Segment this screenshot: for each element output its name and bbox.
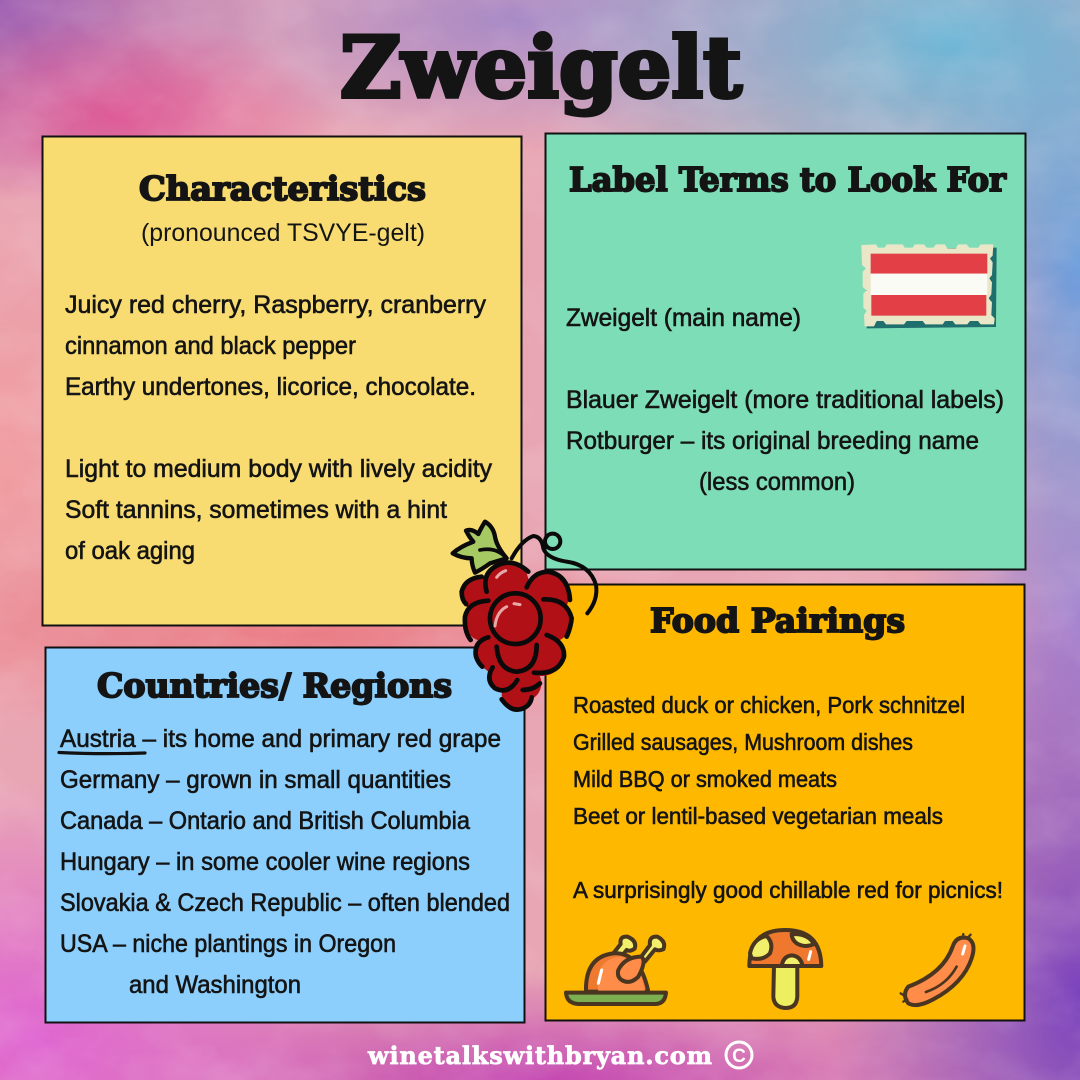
icon: grape cluster [453, 522, 596, 710]
title: Zweigelt [340, 18, 742, 117]
berry highlights [495, 571, 520, 626]
characteristics text: Soft tannins, sometimes with a hint [65, 496, 447, 524]
food pairings text: Beet or lentil-based vegetarian meals [573, 803, 943, 829]
berries fill [461, 561, 572, 710]
characteristics text: Juicy red cherry, Raspberry, cranberry [65, 291, 486, 319]
countries text: Hungary – in some cooler wine regions [60, 848, 470, 876]
countries text: Germany – grown in small quantities [60, 766, 451, 794]
heading: characteristics: Characteristics [139, 169, 426, 208]
label terms text [566, 304, 1004, 496]
countries text: Austria – its home and primary red grape [60, 725, 501, 753]
heading: countries: Countries/ Regions [97, 666, 452, 705]
label terms text: Zweigelt (main name) [566, 304, 801, 332]
Austria underline [59, 752, 145, 754]
icon: roast chicken [566, 937, 666, 1004]
pronunciation note: (pronounced TSVYE-gelt) [141, 219, 425, 247]
tendril [512, 536, 596, 613]
characteristics text: cinnamon and black pepper [65, 332, 356, 360]
label terms text: Blauer Zweigelt (more traditional labels) [566, 386, 1004, 414]
characteristics text [65, 291, 492, 565]
copyright symbol: C [732, 1046, 746, 1067]
food pairings text: Grilled sausages, Mushroom dishes [573, 729, 913, 755]
icon: sausage [901, 934, 973, 1005]
food pairings text: Roasted duck or chicken, Pork schnitzel [573, 692, 965, 718]
copyright symbol [726, 1042, 752, 1068]
berry outlines [462, 563, 572, 710]
food pairings text: Mild BBQ or smoked meats [573, 766, 837, 792]
heading: label terms: Label Terms to Look For [569, 160, 1007, 199]
countries text: Canada – Ontario and British Columbia [60, 807, 470, 835]
center berry [490, 593, 541, 644]
countries text [60, 725, 510, 999]
panel: characteristics [42, 136, 522, 626]
icon: Austrian flag stamp [861, 244, 997, 328]
heading: food pairings: Food Pairings [650, 601, 905, 640]
characteristics text: Light to medium body with lively acidity [65, 455, 492, 483]
countries text: USA – niche plantings in Oregon [60, 930, 396, 958]
footer website: winetalkswithbryan.com [367, 1041, 712, 1070]
panel: food pairings [546, 584, 1024, 1020]
characteristics text: of oak aging [65, 537, 195, 565]
food pairings text: A surprisingly good chillable red for picnics! [573, 877, 1003, 903]
icon: mushroom [749, 930, 821, 1008]
characteristics text: Earthy undertones, licorice, chocolate. [65, 373, 476, 401]
countries text: Slovakia & Czech Republic – often blended [60, 889, 510, 917]
panel: label terms [546, 134, 1026, 570]
food pairings text [573, 692, 1003, 903]
label terms text: Rotburger – its original breeding name [566, 427, 979, 455]
grape leaf [453, 522, 507, 573]
label terms text: (less common) [699, 468, 855, 496]
panel: countries and regions [46, 648, 524, 1022]
countries text: and Washington [129, 971, 301, 999]
